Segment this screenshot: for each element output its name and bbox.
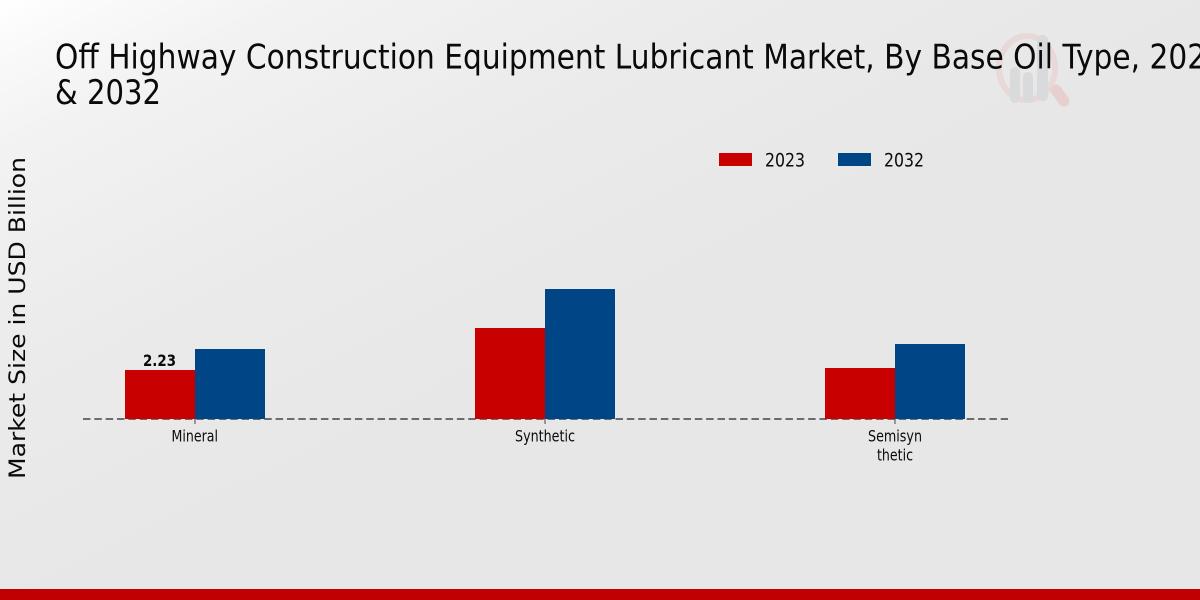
legend: 2032 — [884, 150, 924, 172]
legend — [719, 150, 924, 172]
title: & 2032 — [55, 73, 161, 113]
category label: Synthetic: Synthetic — [515, 426, 575, 446]
title — [55, 38, 1200, 113]
category label: Semisynthetic: thetic — [877, 446, 913, 464]
bars: Semisynthetic — [825, 344, 965, 419]
bars: Synthetic — [475, 289, 615, 419]
bar chart — [83, 289, 1008, 464]
data label: 2.23 — [143, 351, 176, 370]
icon: watermark magnifier logo — [999, 35, 1064, 103]
y axis label: Market Size in USD Billion — [5, 157, 31, 479]
footer bar — [0, 589, 1200, 600]
legend: 2023 — [765, 150, 805, 172]
bars: Mineral — [125, 349, 265, 419]
category label: Semisynthetic: Semisyn — [868, 426, 922, 446]
category label: Semisynthetic — [868, 426, 922, 464]
category label: Mineral: Mineral — [172, 426, 218, 446]
